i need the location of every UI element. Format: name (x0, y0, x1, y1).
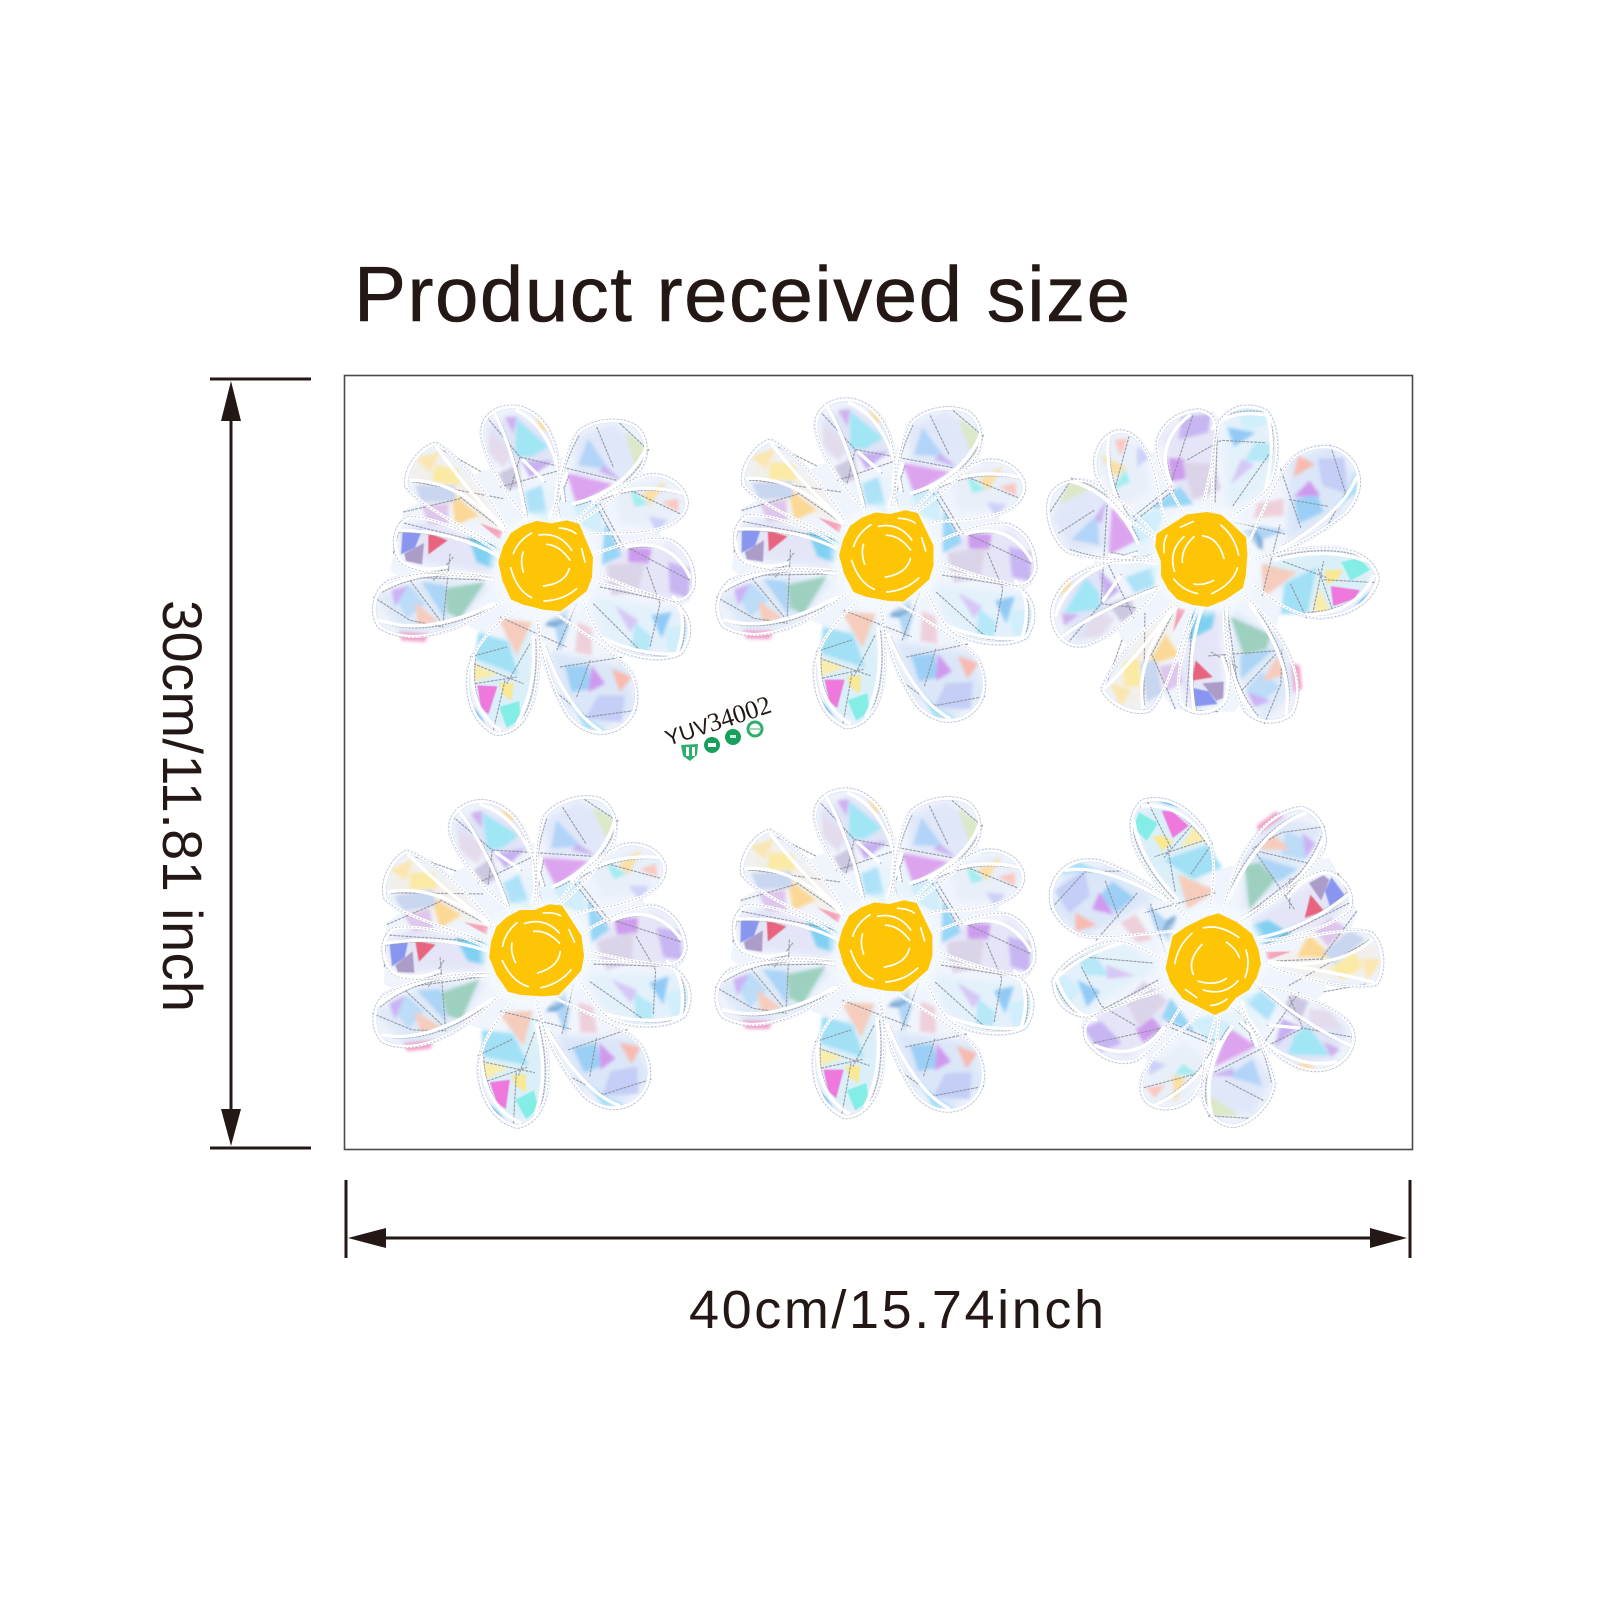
width dimension arrow (344, 1180, 1412, 1258)
flower sticker 5 (704, 778, 1044, 1125)
height dimension arrow (210, 378, 311, 1150)
title: Product received size (354, 250, 1130, 338)
flower sticker 2 (705, 388, 1045, 735)
flower sticker 3 (1019, 383, 1401, 758)
width label: 40cm/15.74inch (689, 1280, 1104, 1340)
code text: YUV (662, 713, 713, 751)
certification icons (681, 722, 762, 761)
flower sticker 6 (989, 720, 1449, 1181)
height label: 30cm/11.81 inch (151, 600, 214, 1012)
product code label (662, 690, 775, 761)
code digits: 34002 (704, 690, 775, 738)
panel: sticker sheet frame (344, 376, 1412, 1150)
flower sticker 4 (338, 768, 713, 1150)
flower sticker 1 (372, 405, 695, 736)
